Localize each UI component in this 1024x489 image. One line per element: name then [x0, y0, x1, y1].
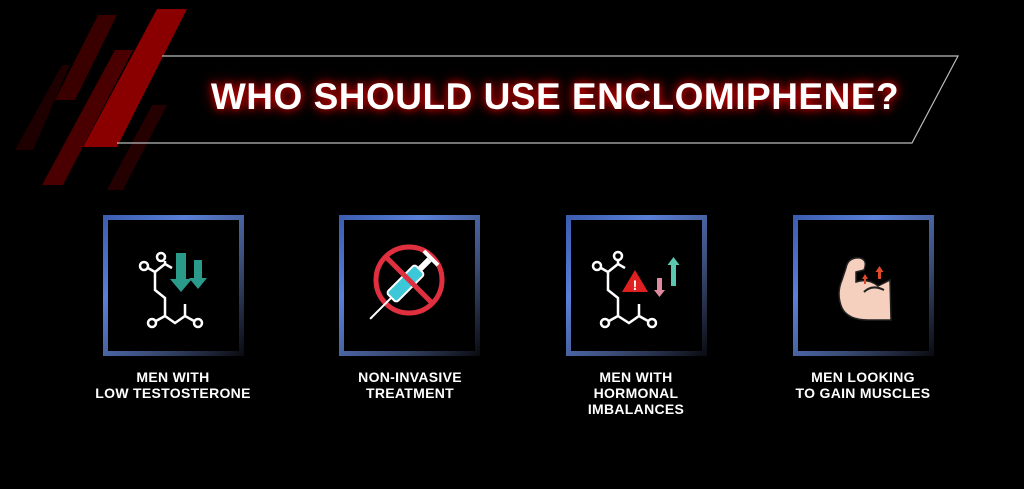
- panel 2: non-invasive: [339, 215, 480, 356]
- title frame: [117, 55, 959, 144]
- icon: flexed bicep: [838, 257, 892, 321]
- label 3: HORMONAL: [594, 385, 678, 401]
- icon: molecule with down arrows: [138, 252, 207, 328]
- label 1: LOW TESTOSTERONE: [95, 385, 251, 401]
- icon: crossed syringe: [370, 244, 444, 320]
- title: WHO SHOULD USE ENCLOMIPHENE?: [211, 76, 899, 117]
- icon: molecule with warning: [592, 250, 680, 328]
- label 1: MEN WITH: [136, 369, 210, 385]
- label 4: TO GAIN MUSCLES: [796, 385, 930, 401]
- label 4: MEN LOOKING: [811, 369, 915, 385]
- label 3: MEN WITH: [599, 369, 673, 385]
- label 3: IMBALANCES: [588, 401, 684, 417]
- label 1: [95, 369, 251, 401]
- label 4: [796, 369, 930, 401]
- panel 1: low testosterone: [103, 215, 244, 356]
- decorative red stripes: [15, 9, 187, 190]
- panel 4: gain muscles: [793, 215, 934, 356]
- icon: molecule with warning: !: [633, 277, 637, 293]
- label 2: NON-INVASIVE: [358, 369, 462, 385]
- label 3: [588, 369, 684, 417]
- label 2: TREATMENT: [366, 385, 454, 401]
- panel 3: hormonal imbalances: [566, 215, 707, 356]
- label 2: [358, 369, 462, 401]
